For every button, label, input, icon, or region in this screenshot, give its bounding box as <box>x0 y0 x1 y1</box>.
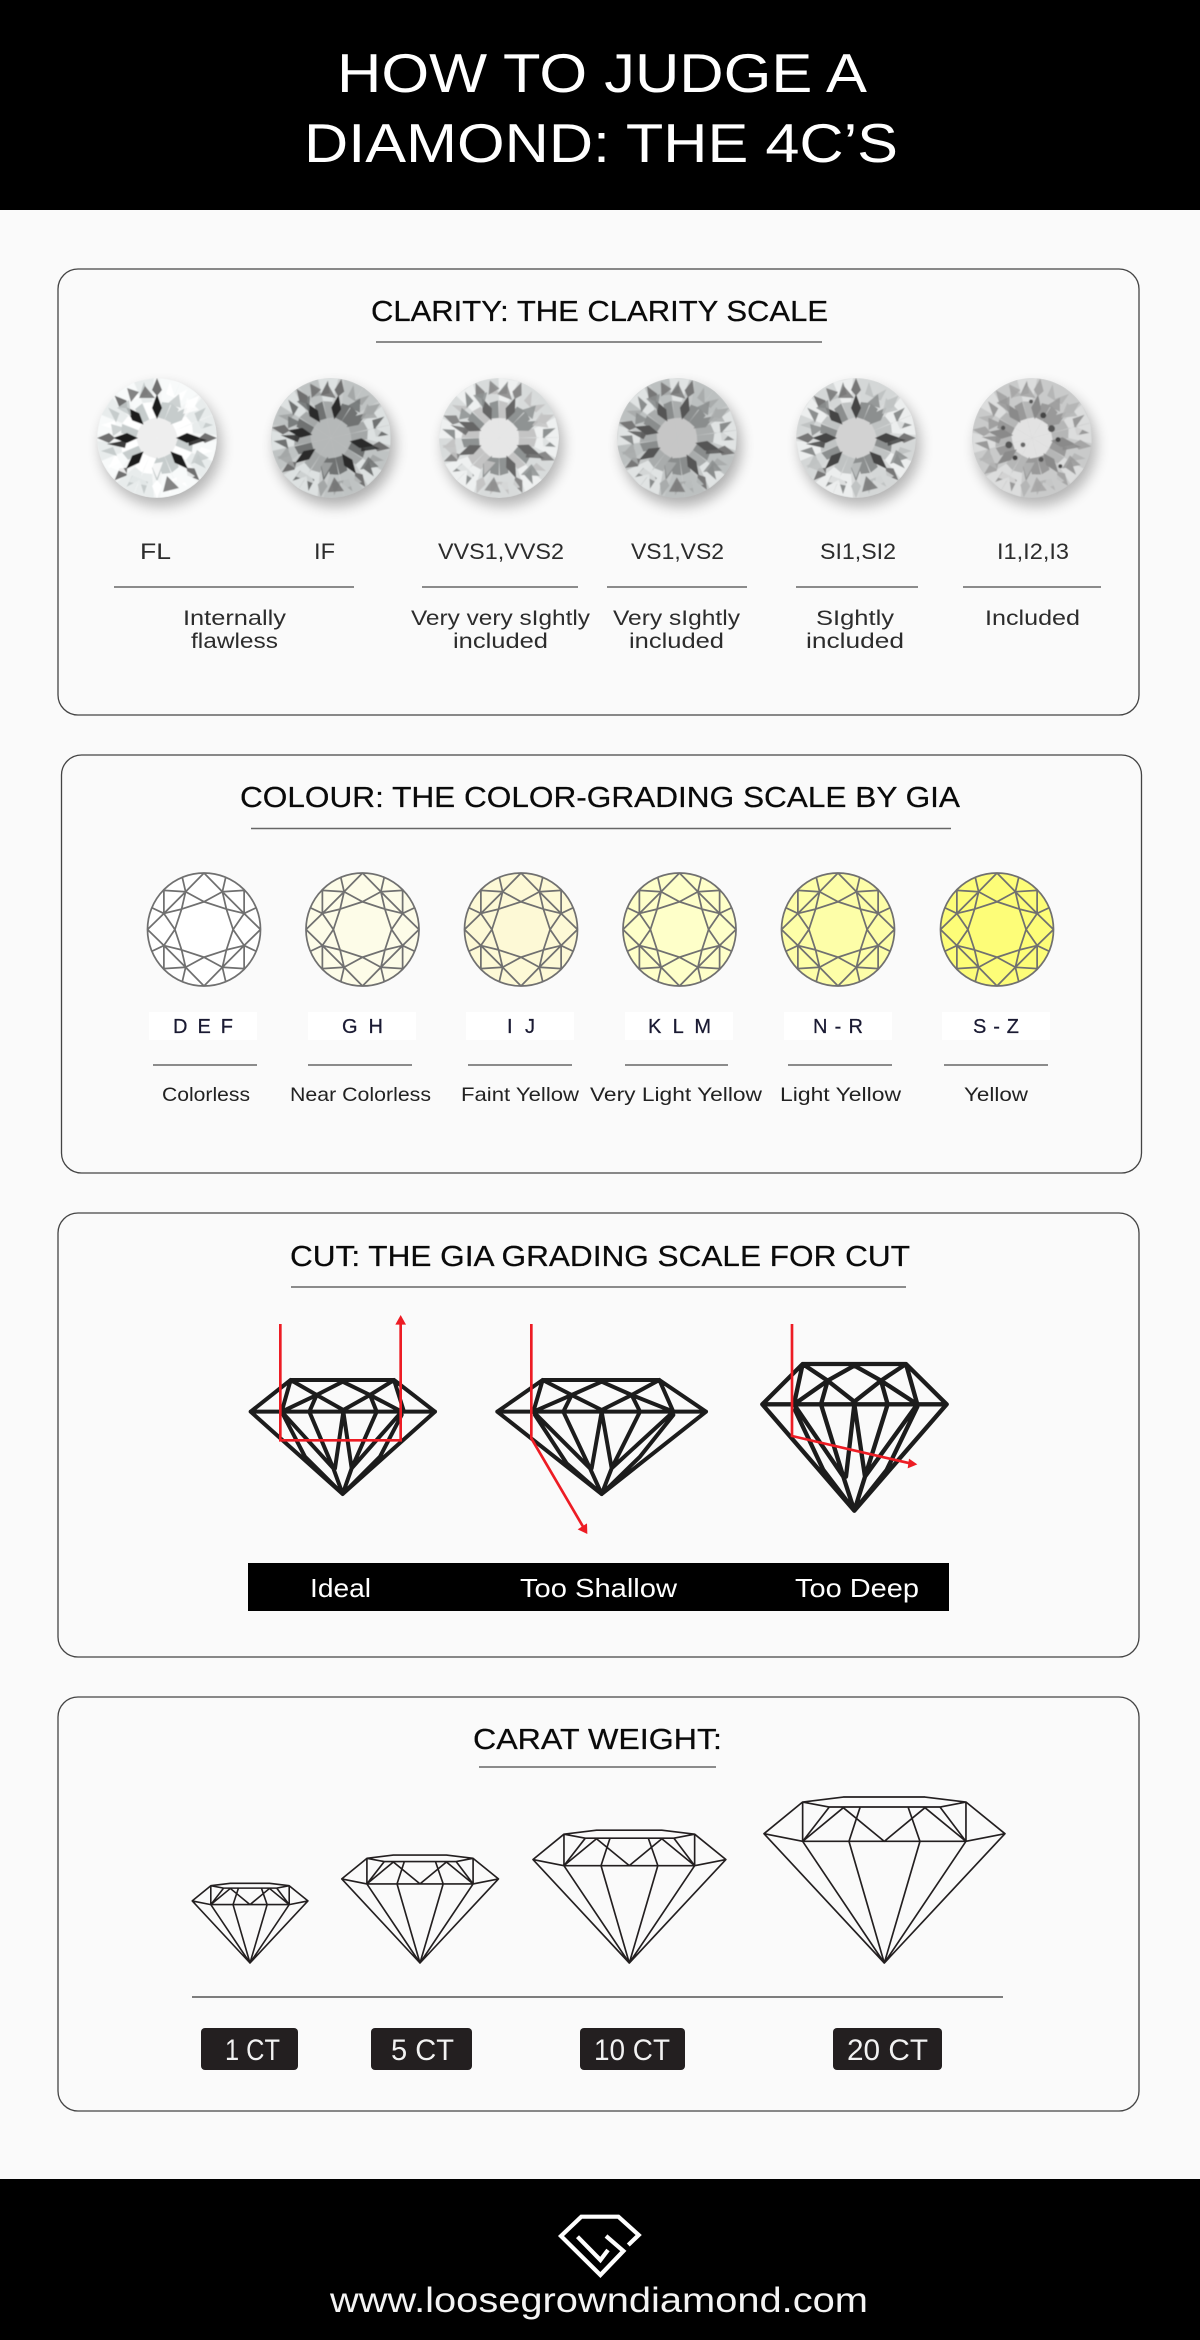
colour descriptions <box>162 1084 1029 1106</box>
grade descriptions: Very very sIghtly <box>411 607 591 630</box>
grade chips: S - Z <box>973 1016 1019 1038</box>
grade descriptions: Included <box>985 607 1080 630</box>
grade descriptions: flawless <box>191 630 278 653</box>
grade descriptions: included <box>629 630 724 653</box>
panel: carat weight <box>58 1697 1139 2111</box>
grade descriptions: SIghtly <box>816 607 895 630</box>
cut labels bar: Too Deep <box>795 1573 919 1603</box>
diagram: too shallow cut with light path <box>497 1324 706 1534</box>
colour diamond: N - R <box>782 873 894 986</box>
title: DIAMOND: THE 4C’S <box>304 112 898 174</box>
colour descriptions: Near Colorless <box>290 1084 431 1106</box>
carat heading: CARAT WEIGHT: <box>473 1724 722 1756</box>
colour descriptions: Yellow <box>964 1084 1029 1106</box>
grade descriptions: included <box>806 630 904 653</box>
cut labels bar: Ideal <box>310 1573 371 1603</box>
carat badges: 5 CT <box>391 2034 454 2067</box>
cut labels bar <box>248 1563 949 1611</box>
grade labels: IF <box>314 539 335 564</box>
diamond photo: I1,I2,I3 <box>964 370 1100 506</box>
grade labels <box>140 539 1069 564</box>
grade chips: K L M <box>648 1016 711 1038</box>
colour descriptions: Colorless <box>162 1084 250 1106</box>
clarity heading: CLARITY: THE CLARITY SCALE <box>371 296 828 328</box>
grade descriptions: Internally <box>183 607 287 630</box>
header banner <box>0 0 1200 210</box>
title <box>304 42 898 174</box>
carat badges: 20 CT <box>847 2034 928 2067</box>
grade chips: I J <box>507 1016 535 1038</box>
colour diamond: D E F <box>148 873 260 986</box>
grade descriptions: Very sIghtly <box>613 607 741 630</box>
colour diamond: S - Z <box>941 873 1053 986</box>
colour diamond: I J <box>465 873 577 986</box>
grade chips: N - R <box>813 1016 863 1038</box>
diamond outline: 10 CT <box>533 1830 726 1963</box>
diamond outline: 20 CT <box>764 1797 1005 1963</box>
colour diamond: K L M <box>623 873 736 986</box>
grade chips <box>149 1012 1050 1040</box>
diamond outline: 1 CT <box>192 1883 308 1963</box>
website url: www.loosegrowndiamond.com <box>329 2281 868 2320</box>
grade labels: SI1,SI2 <box>820 539 896 564</box>
panel: clarity <box>58 269 1139 715</box>
grade chips: G H <box>342 1016 383 1038</box>
diamond photo: VVS1,VVS2 <box>436 378 570 514</box>
icon: brand logo diamond <box>561 2217 639 2275</box>
footer banner <box>0 2179 1200 2340</box>
cut heading: CUT: THE GIA GRADING SCALE FOR CUT <box>290 1241 910 1273</box>
colour descriptions: Faint Yellow <box>461 1084 580 1106</box>
grade labels: VVS1,VVS2 <box>438 539 564 564</box>
panel: colour <box>62 755 1142 1173</box>
colour diamond: G H <box>306 873 419 986</box>
diagram: ideal cut with light path <box>251 1315 435 1494</box>
cut labels bar: Too Shallow <box>520 1573 677 1603</box>
diamond outline: 5 CT <box>342 1855 498 1963</box>
carat badges: 1 CT <box>225 2034 280 2067</box>
diamond photo: VS1,VS2 <box>614 378 748 514</box>
colour heading: COLOUR: THE COLOR-GRADING SCALE BY GIA <box>240 782 961 814</box>
diamond photo: IF <box>261 368 401 508</box>
colour descriptions: Light Yellow <box>780 1084 902 1106</box>
grade descriptions <box>183 607 1080 653</box>
grade labels: VS1,VS2 <box>631 539 724 564</box>
grade descriptions: included <box>453 630 548 653</box>
diamond photo: FL <box>97 378 221 506</box>
diamond photo: SI1,SI2 <box>796 378 920 506</box>
title: HOW TO JUDGE A <box>337 42 867 104</box>
carat badges <box>201 2028 942 2070</box>
grade labels: FL <box>140 539 171 564</box>
grade chips: D E F <box>173 1016 233 1038</box>
diagram: too deep cut with light path <box>762 1324 947 1511</box>
colour descriptions: Very Light Yellow <box>590 1084 763 1106</box>
carat badges: 10 CT <box>594 2034 670 2067</box>
grade labels: I1,I2,I3 <box>997 539 1069 564</box>
panel: cut <box>58 1213 1139 1657</box>
